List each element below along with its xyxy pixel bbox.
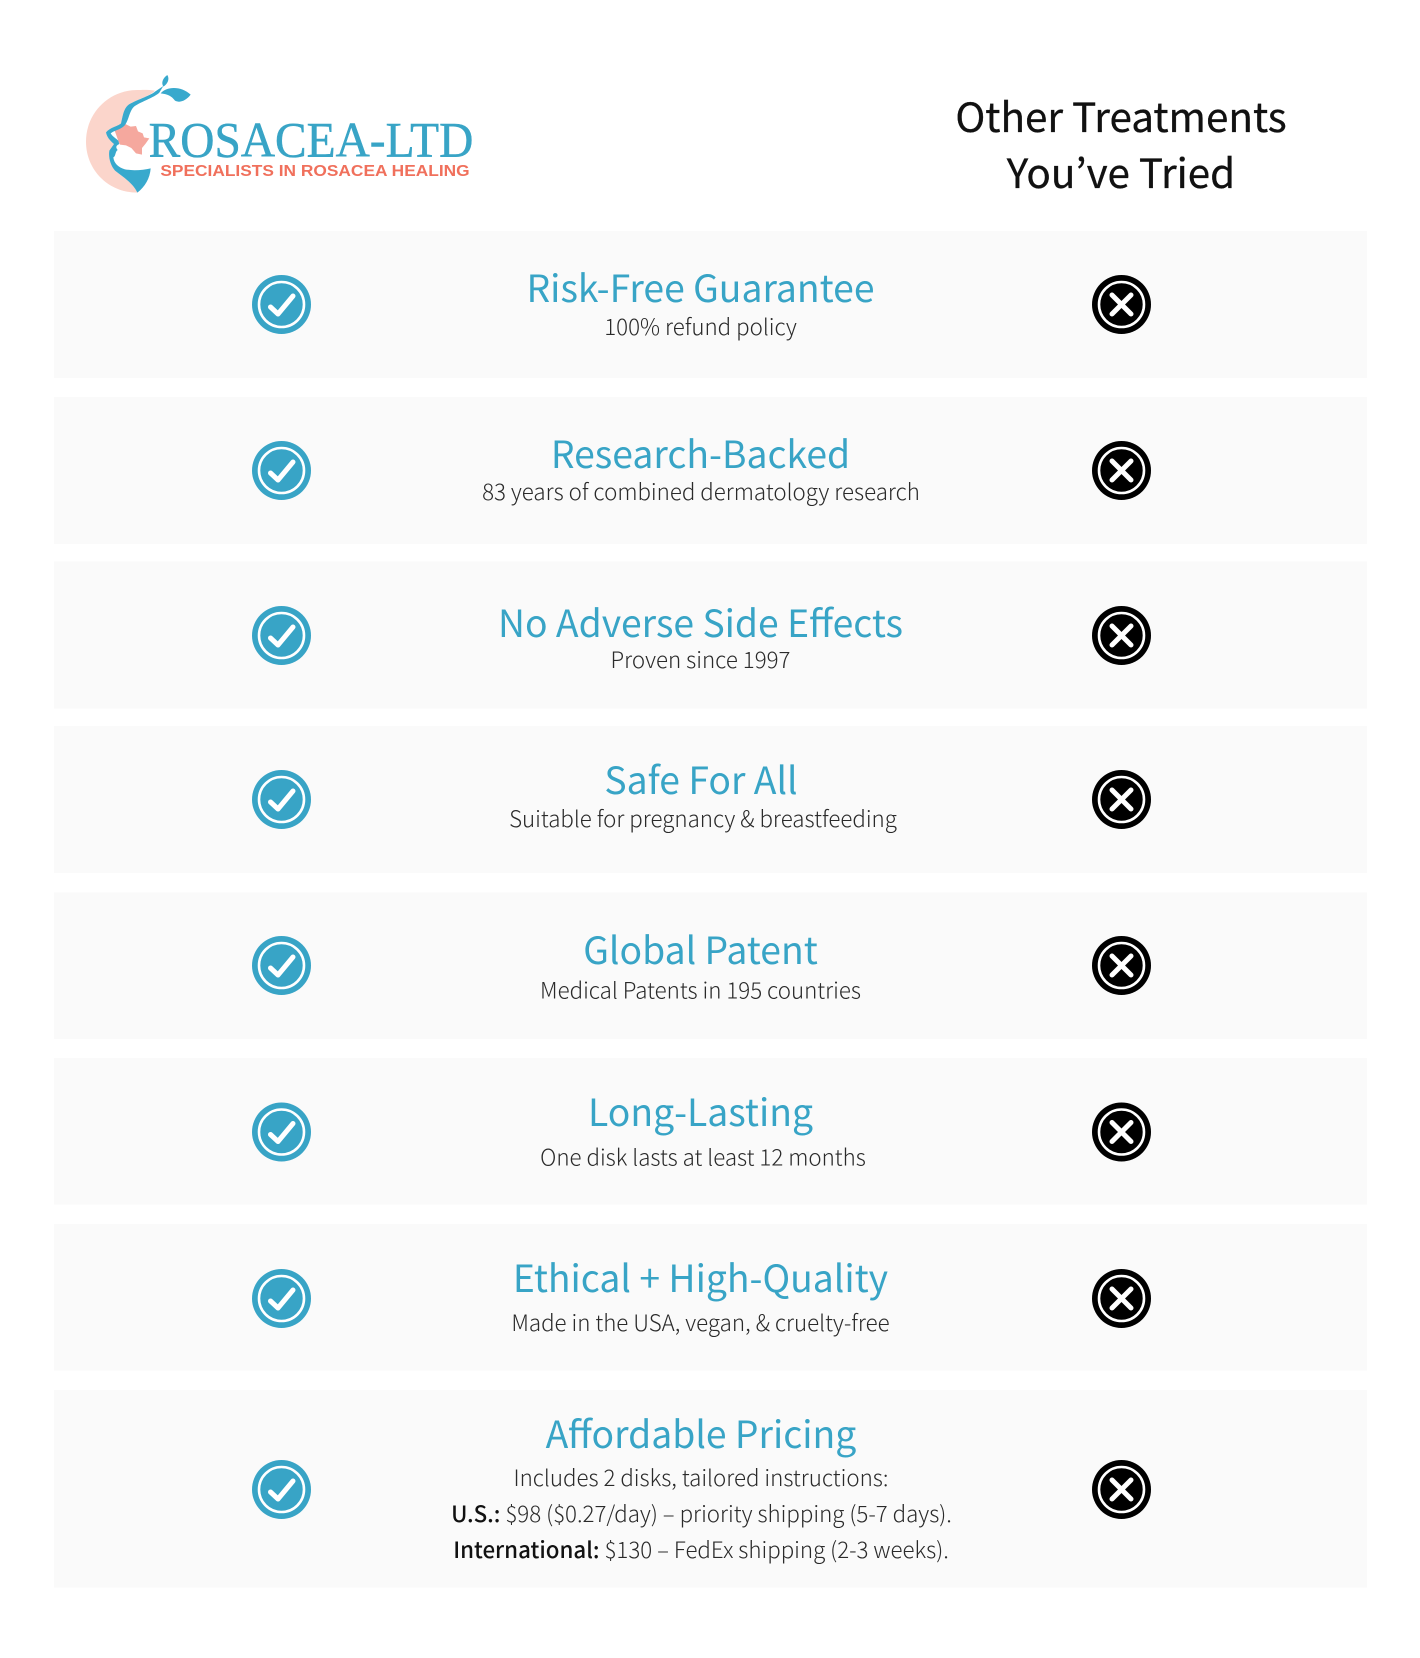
icon: cross — [1092, 1102, 1151, 1162]
panel: Affordable Pricing — [54, 1390, 1367, 1588]
icon: check — [252, 770, 311, 829]
panel: No Adverse Side Effects — [54, 562, 1367, 708]
icon: check — [252, 1102, 311, 1162]
description: Suitable for pregnancy & breastfeeding — [509, 802, 897, 834]
heading: Risk-Free Guarantee — [527, 259, 874, 313]
logo: wordmark: ROSACEA-LTD — [149, 112, 473, 168]
panel: Ethical + High-Quality — [54, 1224, 1367, 1370]
heading: Long-Lasting — [588, 1083, 813, 1137]
title: Other Treatments You've Tried: Other Treatments — [955, 85, 1287, 144]
icon: cross — [1092, 1269, 1151, 1328]
logo: pink crescent — [86, 90, 155, 193]
heading: Research-Backed — [551, 425, 850, 479]
description: 83 years of combined dermatology research — [482, 475, 920, 507]
description: Medical Patents in 195 countries — [540, 974, 861, 1006]
logo: Rosacea-Ltd — [86, 75, 473, 193]
icon: check — [252, 606, 311, 665]
icon: cross — [1092, 606, 1151, 665]
icon: cross — [1092, 1460, 1151, 1519]
icon: check — [252, 936, 311, 995]
title: Other Treatments You've Tried — [955, 85, 1287, 200]
heading: Global Patent — [583, 921, 818, 975]
icon: check — [252, 1460, 311, 1519]
panel: Research-Backed — [54, 397, 1367, 544]
description — [451, 1461, 952, 1565]
icon: cross — [1092, 936, 1151, 995]
icon: check — [252, 1269, 311, 1328]
description: Includes 2 disks, tailored instructions: — [514, 1461, 888, 1493]
logo: rosacea patch — [115, 124, 149, 155]
panel: Global Patent — [54, 892, 1367, 1039]
description: One disk lasts at least 12 months — [540, 1140, 866, 1172]
description: Proven since 1997 — [611, 643, 790, 675]
heading: Safe For All — [604, 751, 798, 805]
icon: cross — [1092, 770, 1151, 829]
logo: face mark — [86, 75, 191, 193]
description: U.S.: $98 ($0.27/day) – priority shipping (5-7 days). — [451, 1497, 952, 1529]
logo: tagline: SPECIALISTS IN ROSACEA HEALING — [160, 163, 470, 180]
icon: cross — [1092, 275, 1151, 334]
heading: Affordable Pricing — [546, 1405, 856, 1459]
description: International: $130 – FedEx shipping (2-3 weeks). — [453, 1533, 949, 1565]
logo: profile and leaves — [106, 75, 191, 193]
icon: check — [252, 275, 311, 334]
description: 100% refund policy — [604, 310, 797, 342]
heading: No Adverse Side Effects — [498, 594, 903, 648]
icon: cross — [1092, 441, 1151, 500]
panel: Long-Lasting — [54, 1058, 1367, 1204]
panel: Safe For All — [54, 726, 1367, 873]
title: Other Treatments You've Tried: You’ve Tried — [1006, 141, 1235, 200]
panel: Risk-Free Guarantee — [54, 231, 1367, 378]
description: Made in the USA, vegan, & cruelty-free — [511, 1306, 890, 1338]
heading: Ethical + High-Quality — [513, 1249, 888, 1303]
icon: check — [252, 441, 311, 500]
